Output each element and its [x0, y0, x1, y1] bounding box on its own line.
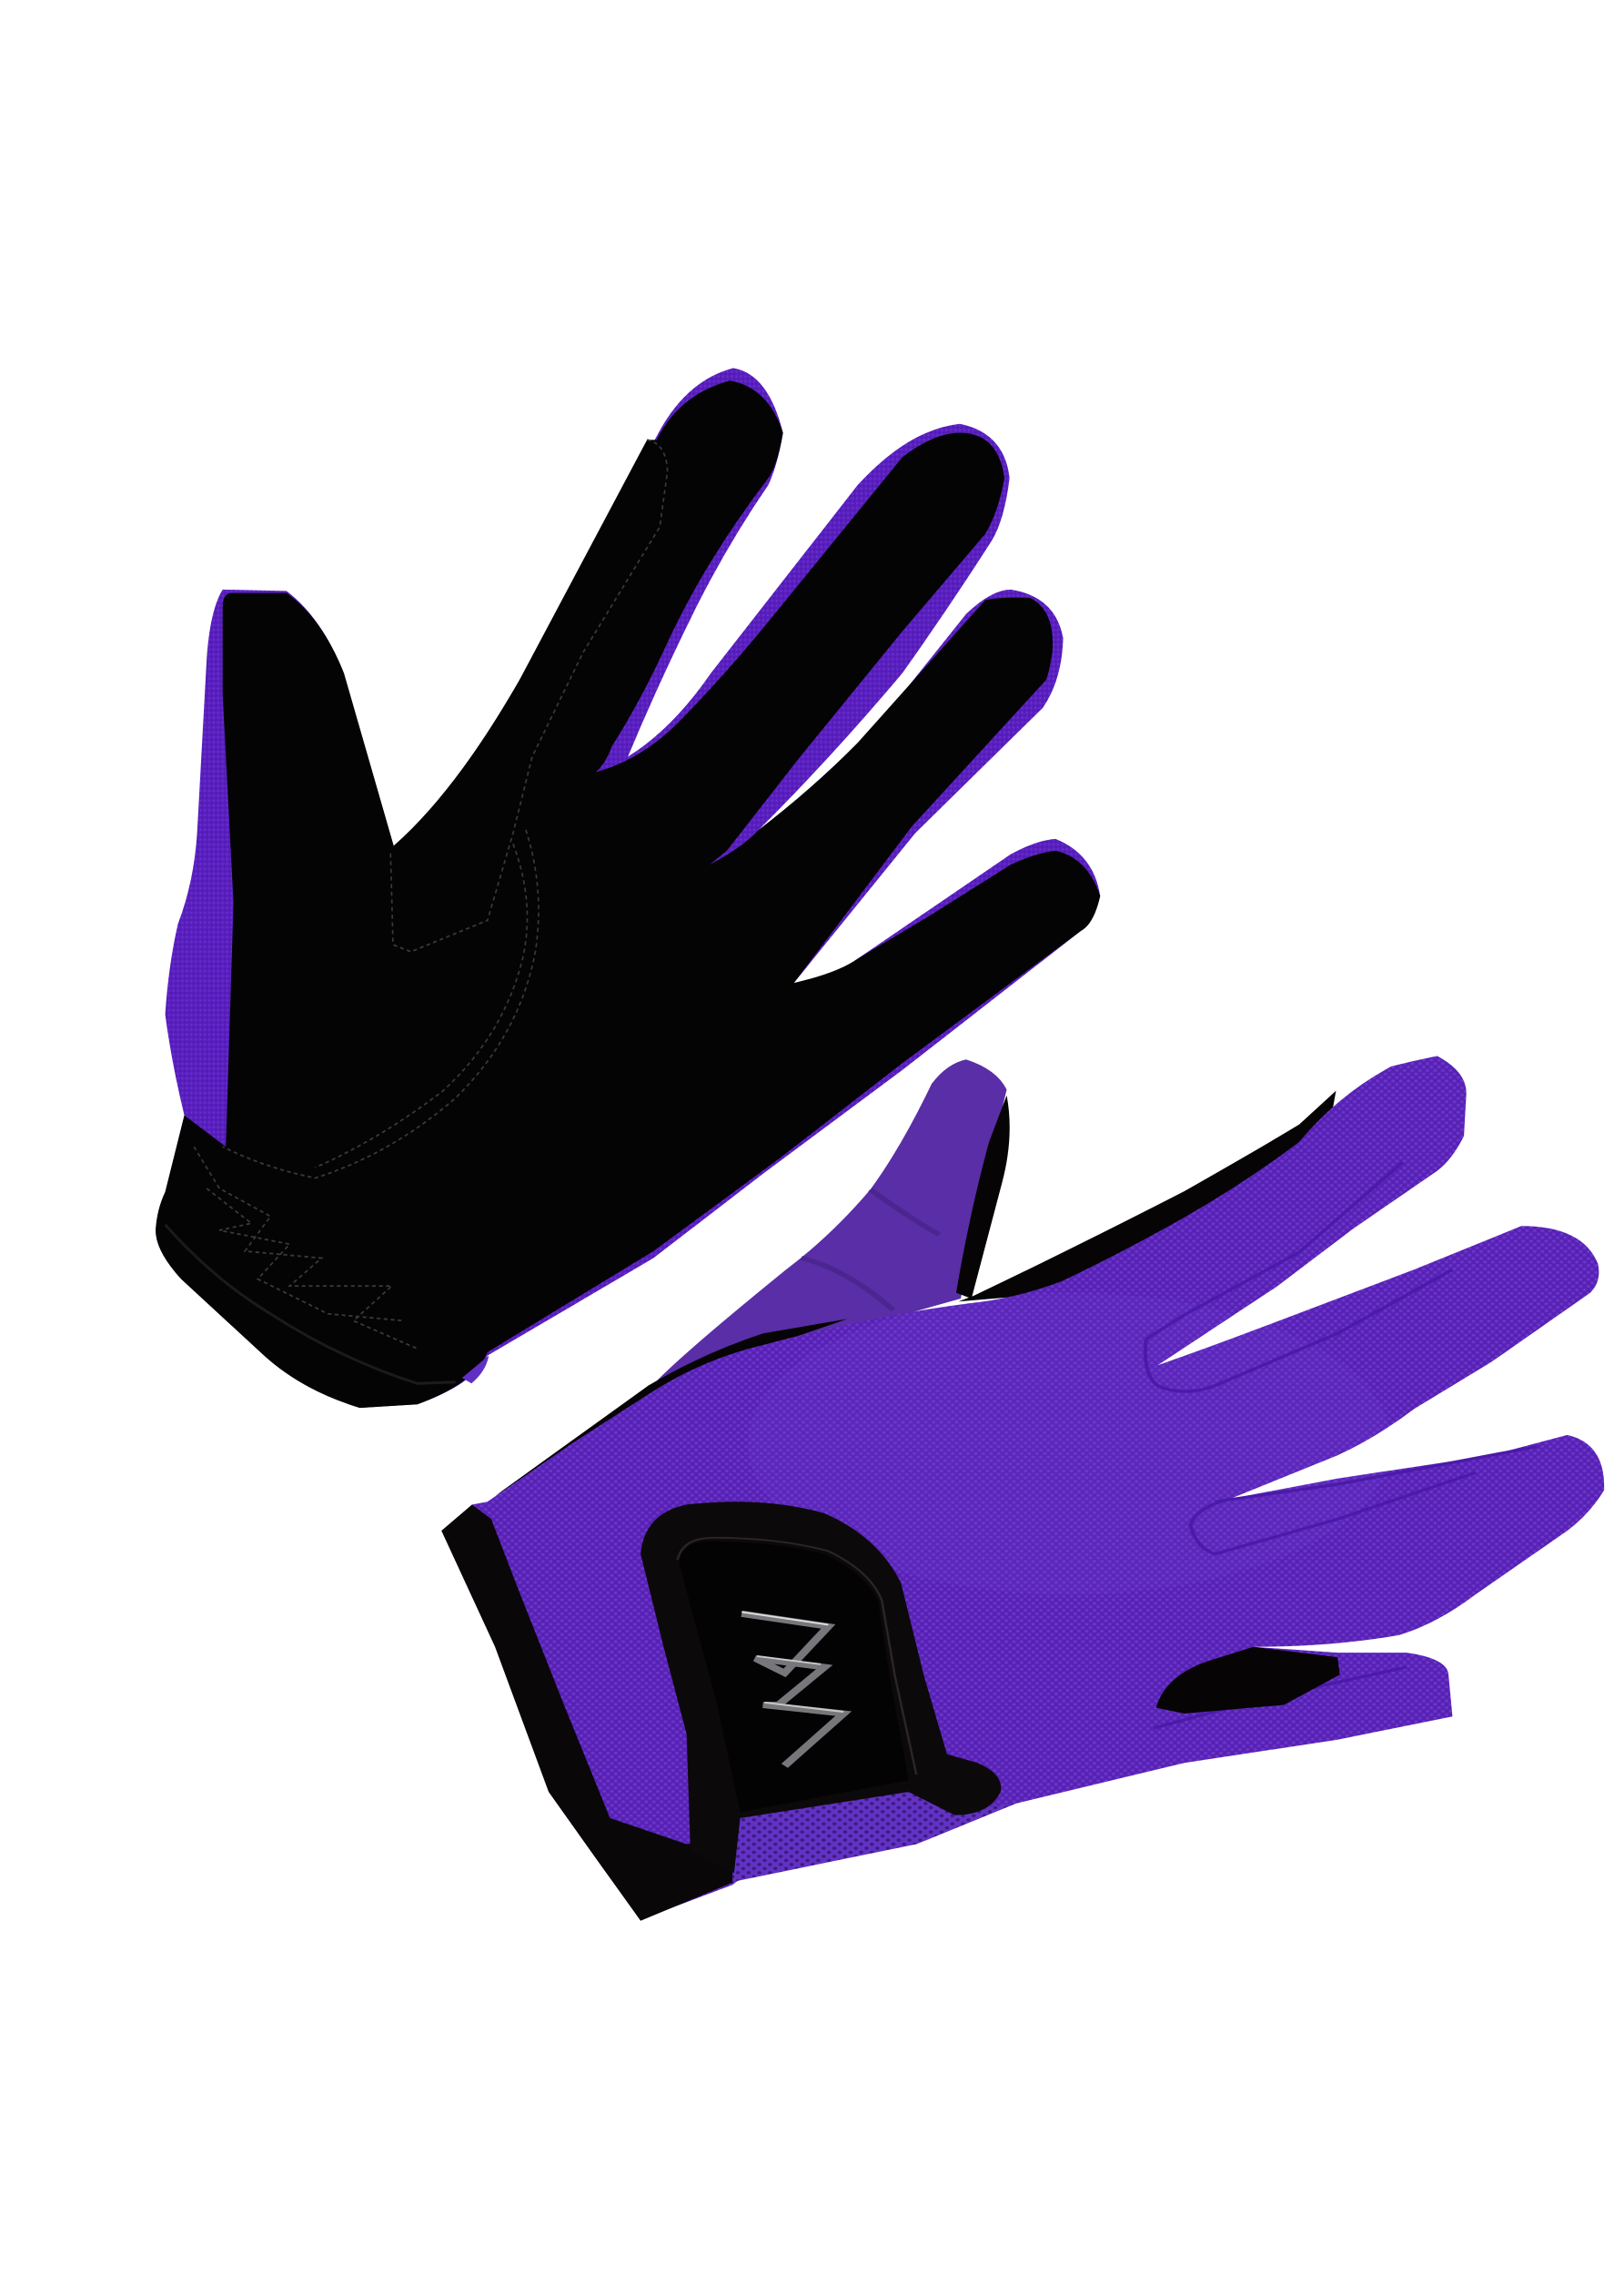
wrist binding [441, 1504, 734, 1921]
thumb black edge [956, 1096, 1010, 1299]
main purple shell with fingers [441, 1056, 1604, 1919]
thumb [652, 1059, 1007, 1386]
finger seams [1145, 1162, 1537, 1728]
tab border stitch [678, 1538, 916, 1774]
perforated mesh vent [732, 1777, 1016, 1882]
tab suede centre [679, 1541, 909, 1812]
wrist tab [641, 1502, 1001, 1873]
cuff binding line [166, 1225, 456, 1383]
tab border [641, 1502, 1001, 1873]
black seam under thumb [495, 1319, 847, 1496]
thumb wrinkle shading [802, 1189, 939, 1310]
lower purple gusset near cuff [462, 1356, 489, 1383]
purple backing of top glove [156, 368, 1100, 1408]
silver logo [741, 1612, 843, 1765]
stitching on palm [194, 440, 668, 1349]
bottom glove: purple back side [441, 1056, 1604, 1921]
soft lighter sheen on shell [917, 1295, 1386, 1495]
black suede palm panel [156, 380, 1100, 1408]
black underside strip behind index finger [958, 1091, 1336, 1301]
illustration: pair of riding gloves [156, 368, 1605, 1921]
little finger black insert [1156, 1647, 1340, 1714]
top glove: black palm side [156, 368, 1100, 1408]
